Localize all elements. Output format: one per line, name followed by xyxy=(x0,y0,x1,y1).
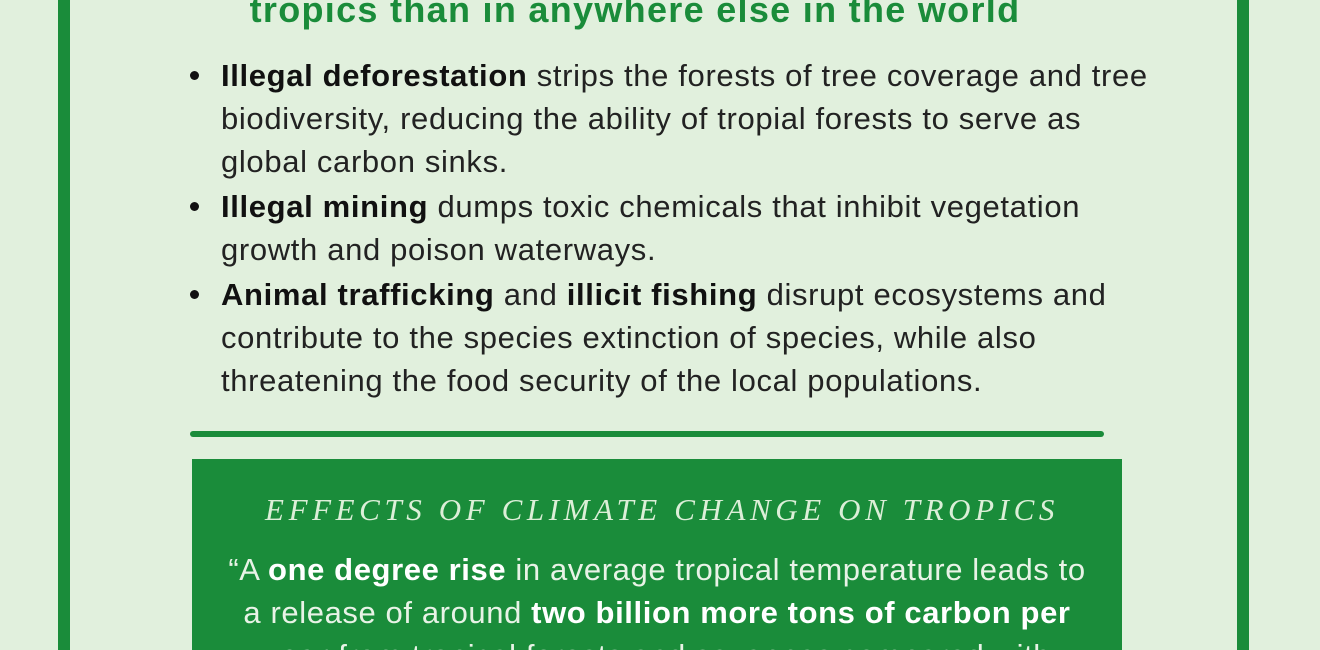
bullet: trafficking: threatening the food security of the local populations. xyxy=(221,363,982,398)
bullet list xyxy=(190,58,1148,398)
bullet: mining: Illegal mining dumps toxic chemicals that inhibit vegetation xyxy=(221,189,1080,224)
bullet: trafficking: contribute to the species extinction of species, while also xyxy=(221,320,1036,355)
bullet: mining: growth and poison waterways. xyxy=(221,232,656,267)
bullet: deforestation: global carbon sinks. xyxy=(221,144,508,179)
left border xyxy=(58,0,70,650)
panel: effects of climate change xyxy=(192,459,1122,650)
bullet: deforestation: Illegal deforestation strips the forests of tree coverage and tree xyxy=(221,58,1148,93)
quote text: “A one degree rise in average tropical temperature leads to xyxy=(228,552,1086,587)
bullet: deforestation xyxy=(190,58,1148,179)
bullet: trafficking: Animal trafficking and illicit fishing disrupt ecosystems and xyxy=(221,277,1107,312)
bullet: mining xyxy=(190,189,1080,267)
bullet: trafficking xyxy=(190,277,1107,398)
bullet: deforestation: biodiversity, reducing the ability of tropial forests to serve as xyxy=(221,101,1081,136)
panel heading: EFFECTS OF CLIMATE CHANGE ON TROPICS xyxy=(265,492,1059,527)
quote text: a release of around two billion more tons of carbon per xyxy=(243,595,1071,630)
right border xyxy=(1237,0,1249,650)
quote text xyxy=(228,552,1086,650)
